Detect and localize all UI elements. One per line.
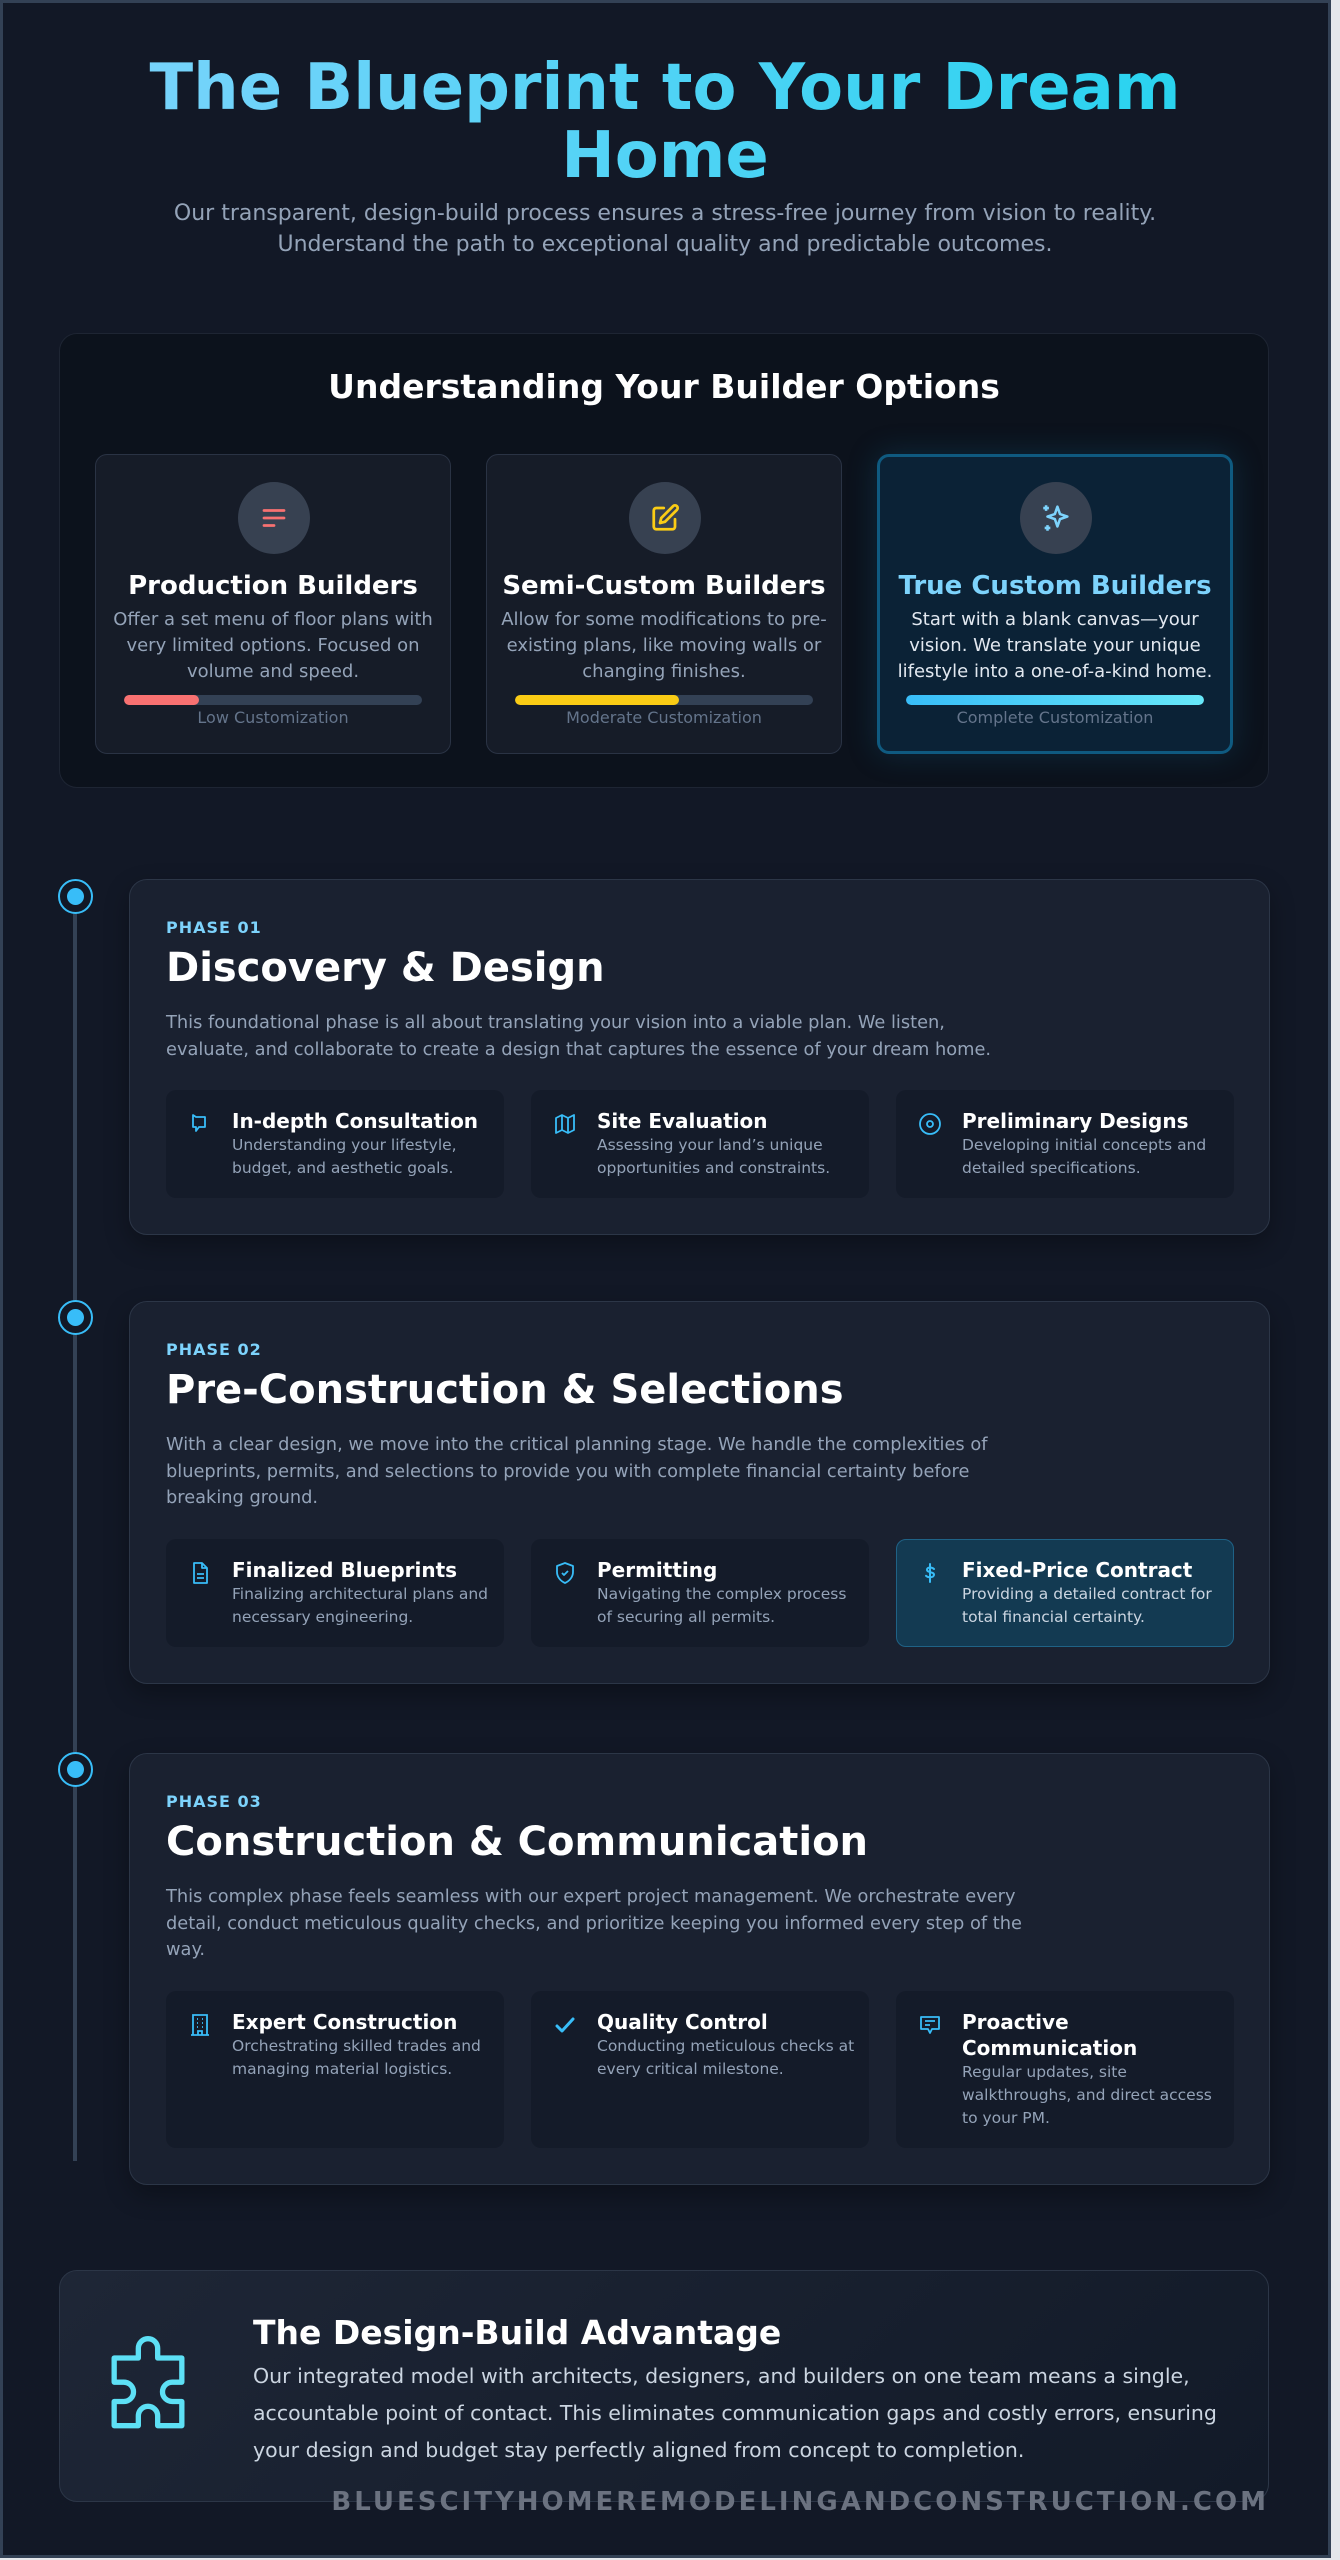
icon: sparkles bbox=[1020, 482, 1092, 554]
item: proactive communication bbox=[896, 1990, 1234, 2148]
card: true custom builders: Complete Customization bbox=[957, 708, 1153, 727]
watermark: BLUESCITYHOMEREMODELINGANDCONSTRUCTION.COM bbox=[331, 2487, 1269, 2517]
item: consultation: In-depth Consultation bbox=[232, 1109, 478, 1133]
item: consultation: Understanding your lifestyle, budget, and aesthetic goals. bbox=[232, 1136, 457, 1177]
icon: edit bbox=[629, 482, 701, 554]
panel: phase 03 bbox=[129, 1753, 1270, 2184]
item: permitting: Permitting bbox=[597, 1558, 717, 1582]
card: production builders: Offer a set menu of floor plans with very limited options. Focused on volume and speed. bbox=[113, 609, 433, 682]
timeline dot 3 bbox=[58, 1752, 93, 1787]
item: preliminary designs bbox=[896, 1090, 1234, 1198]
item: expert construction bbox=[166, 1990, 504, 2148]
item: permitting bbox=[531, 1538, 869, 1646]
icon: menu lines bbox=[238, 482, 310, 554]
title bbox=[60, 54, 1270, 190]
card: semi-custom builders: Semi-Custom Builders bbox=[502, 571, 826, 601]
card: true custom builders bbox=[877, 454, 1233, 754]
item: preliminary designs: Preliminary Designs bbox=[962, 1109, 1188, 1133]
item: blueprints: Finalized Blueprints bbox=[232, 1558, 457, 1582]
timeline line bbox=[73, 895, 77, 2161]
subtitle: Our transparent, design-build process ensures a stress-free journey from vision to reality. bbox=[174, 201, 1156, 226]
card: semi-custom builders: Allow for some modifications to pre-existing plans, like moving walls or changing finishes. bbox=[501, 609, 827, 682]
panel: design-build advantage bbox=[59, 2270, 1269, 2502]
item: site evaluation: Assessing your land’s unique opportunities and constraints. bbox=[597, 1136, 830, 1177]
panel: phase 01: This foundational phase is all about translating your vision into a viable plan. We listen, evaluate, and collaborate to create a design that captures the essence of your dream home. bbox=[166, 1012, 991, 1060]
item: permitting: Navigating the complex process of securing all permits. bbox=[597, 1584, 846, 1626]
item: consultation bbox=[166, 1090, 504, 1198]
heading: phase 03: Construction & Communication bbox=[166, 1819, 868, 1865]
timeline dot 2 bbox=[58, 1300, 93, 1335]
item: blueprints: Finalizing architectural plans and necessary engineering. bbox=[232, 1584, 488, 1626]
panel: phase 03: This complex phase feels seamless with our expert project management. We orchestrate every detail, conduct meticulous quality checks, and prioritize keeping you informed every step of the way. bbox=[166, 1886, 1022, 1960]
title: Home bbox=[561, 119, 769, 193]
panel: phase 02 bbox=[129, 1301, 1270, 1684]
item: quality control bbox=[531, 1990, 869, 2148]
item: site evaluation bbox=[531, 1090, 869, 1198]
item: proactive communication: Regular updates, site walkthroughs, and direct access to your PM. bbox=[962, 2062, 1212, 2126]
panel: phase 02: With a clear design, we move into the critical planning stage. We handle the complexities of blueprints, permits, and selections to provide you with complete financial certainty before breaking ground. bbox=[166, 1434, 987, 1508]
item: quality control: Conducting meticulous checks at every critical milestone. bbox=[597, 2036, 854, 2078]
heading: builder options: Understanding Your Builder Options bbox=[328, 367, 1000, 406]
card: true custom builders: Start with a blank canvas—your vision. We translate your unique lifestyle into a one-of-a-kind home. bbox=[898, 609, 1212, 682]
heading: phase 02: Pre-Construction & Selections bbox=[166, 1367, 844, 1413]
icon: puzzle bbox=[112, 2336, 184, 2428]
item: expert construction: Orchestrating skilled trades and managing material logistics. bbox=[232, 2036, 481, 2078]
item: proactive communication: Proactive bbox=[962, 2010, 1069, 2034]
item: fixed-price contract: Providing a detailed contract for total financial certainty. bbox=[962, 1584, 1212, 1626]
title: The Blueprint to Your Dream bbox=[150, 51, 1180, 125]
heading: advantage: The Design-Build Advantage bbox=[253, 2313, 781, 2352]
card: production builders: Production Builders bbox=[128, 571, 418, 601]
panel: builder options bbox=[59, 333, 1269, 788]
heading: phase 01: Discovery & Design bbox=[166, 945, 605, 991]
item: expert construction: Expert Construction bbox=[232, 2010, 457, 2034]
card: semi-custom builders: Moderate Customization bbox=[566, 708, 762, 727]
card: semi-custom builders bbox=[486, 454, 842, 754]
item: fixed-price contract: Fixed-Price Contract bbox=[962, 1558, 1192, 1582]
panel: phase 03: PHASE 03 bbox=[166, 1792, 262, 1811]
card: production builders bbox=[95, 454, 451, 754]
subtitle: Understand the path to exceptional quality and predictable outcomes. bbox=[278, 232, 1052, 257]
text: advantage: Our integrated model with architects, designers, and builders on one team means a single, accountable point of contact. This eliminates communication gaps and costly errors, ensuring your design and budget stay perfectly aligned from concept to completion. bbox=[253, 2364, 1217, 2462]
card: true custom builders: True Custom Builders bbox=[898, 571, 1212, 601]
item: blueprints bbox=[166, 1538, 504, 1646]
item: quality control: Quality Control bbox=[597, 2010, 768, 2034]
item: fixed-price contract bbox=[896, 1538, 1234, 1646]
card: production builders: Low Customization bbox=[197, 708, 349, 727]
panel: phase 02: PHASE 02 bbox=[166, 1340, 262, 1359]
item: proactive communication: Communication bbox=[962, 2036, 1137, 2060]
panel: phase 01: PHASE 01 bbox=[166, 918, 262, 937]
item: preliminary designs: Developing initial concepts and detailed specifications. bbox=[962, 1136, 1206, 1177]
timeline dot 1 bbox=[58, 879, 93, 914]
subtitle bbox=[174, 201, 1156, 257]
panel: phase 01 bbox=[129, 879, 1270, 1235]
item: site evaluation: Site Evaluation bbox=[597, 1109, 768, 1133]
